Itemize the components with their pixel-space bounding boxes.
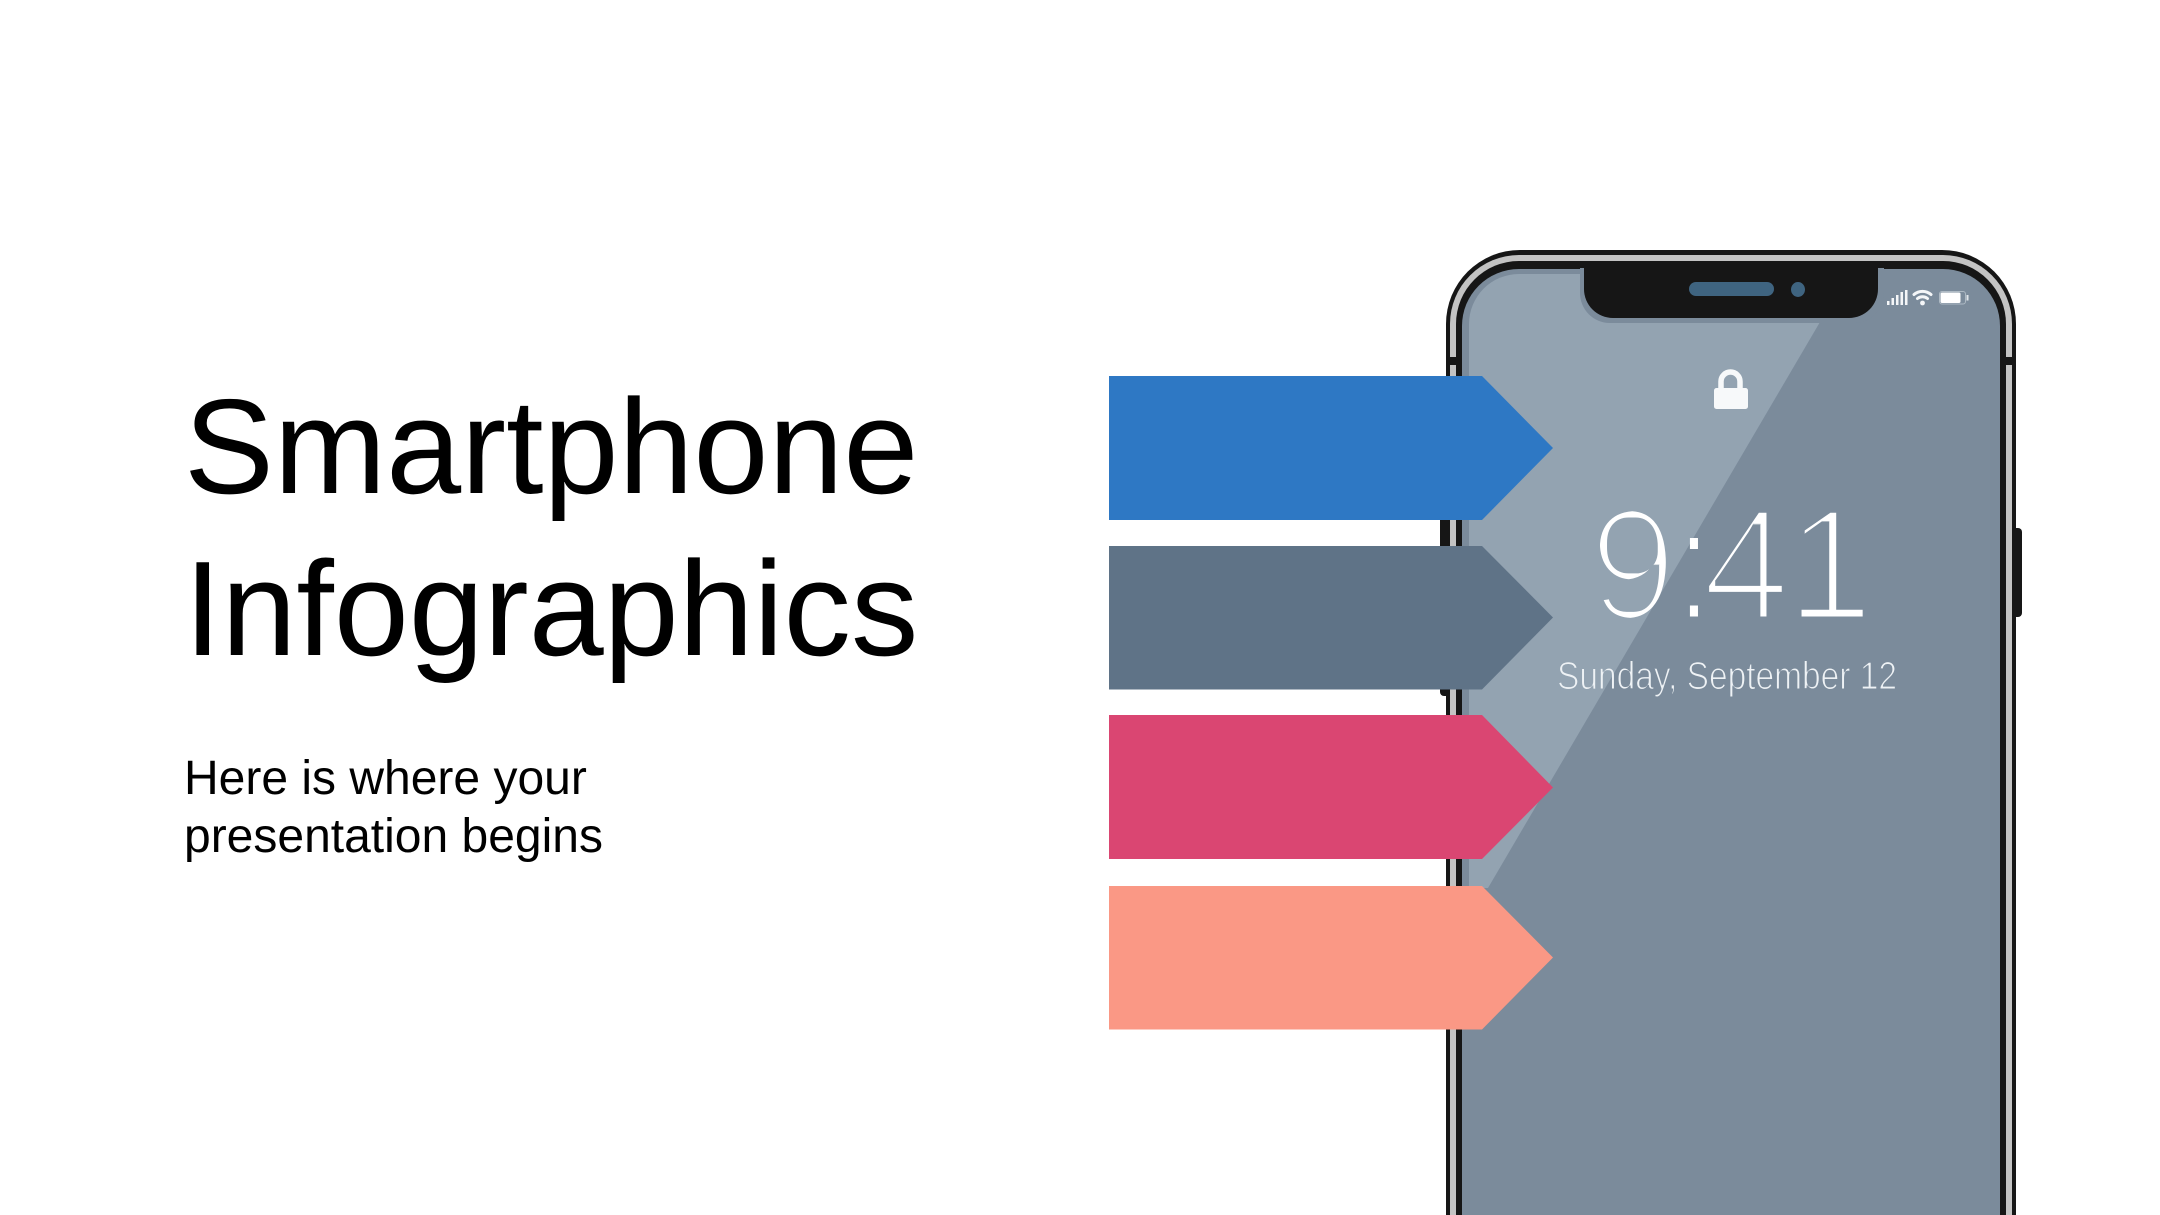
icon: signal bbox=[1887, 290, 1908, 305]
arrow: slate bbox=[1109, 546, 1553, 690]
smartphone bbox=[1440, 250, 2022, 1215]
icon: wifi bbox=[1914, 291, 1931, 305]
clock time: 9:41 bbox=[1589, 477, 1874, 653]
subtitle: Here is where your bbox=[184, 752, 587, 805]
title: Smartphone bbox=[184, 371, 918, 522]
subtitle: presentation begins bbox=[184, 810, 603, 863]
title: Infographics bbox=[184, 533, 918, 684]
notch bbox=[1580, 261, 1884, 323]
button: right power bbox=[2010, 528, 2022, 617]
button: left volume bbox=[1440, 510, 1452, 696]
date: Sunday, September 12 bbox=[1557, 655, 1897, 698]
screen bbox=[1462, 269, 2000, 1215]
arrow: pink bbox=[1109, 715, 1553, 859]
arrow: coral bbox=[1109, 886, 1553, 1030]
arrow: blue bbox=[1109, 376, 1553, 520]
icon: battery bbox=[1940, 292, 1968, 304]
icon: lock bbox=[1714, 372, 1748, 409]
phone frame bbox=[1446, 250, 2016, 1215]
